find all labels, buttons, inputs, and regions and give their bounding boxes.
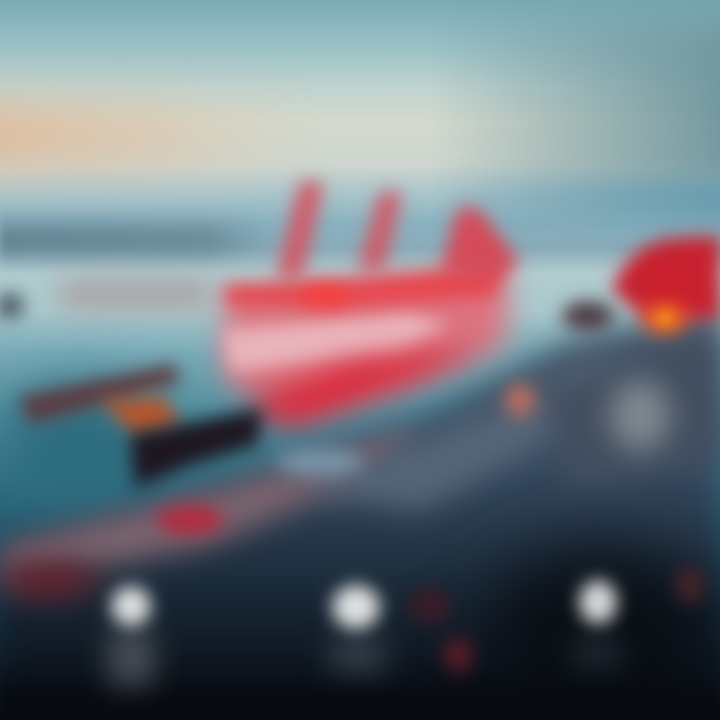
dock surface xyxy=(0,305,720,720)
crane mast 3 xyxy=(440,208,520,280)
lower red hull xyxy=(250,345,490,425)
white superstructure band xyxy=(222,312,450,372)
ship hull xyxy=(225,280,510,410)
red ship with cranes xyxy=(222,182,520,425)
glowing lamp 1 xyxy=(108,586,154,685)
red dome on right xyxy=(562,236,720,334)
upper deck red band xyxy=(222,262,510,308)
crane mast 1 xyxy=(276,182,324,278)
dark boat on left xyxy=(18,364,262,488)
glowing lamp 2 xyxy=(330,585,385,670)
distant shoreline xyxy=(0,228,280,319)
crane mast 2 xyxy=(358,192,402,270)
glowing lamp 3 xyxy=(572,580,622,666)
dock details xyxy=(0,383,705,673)
